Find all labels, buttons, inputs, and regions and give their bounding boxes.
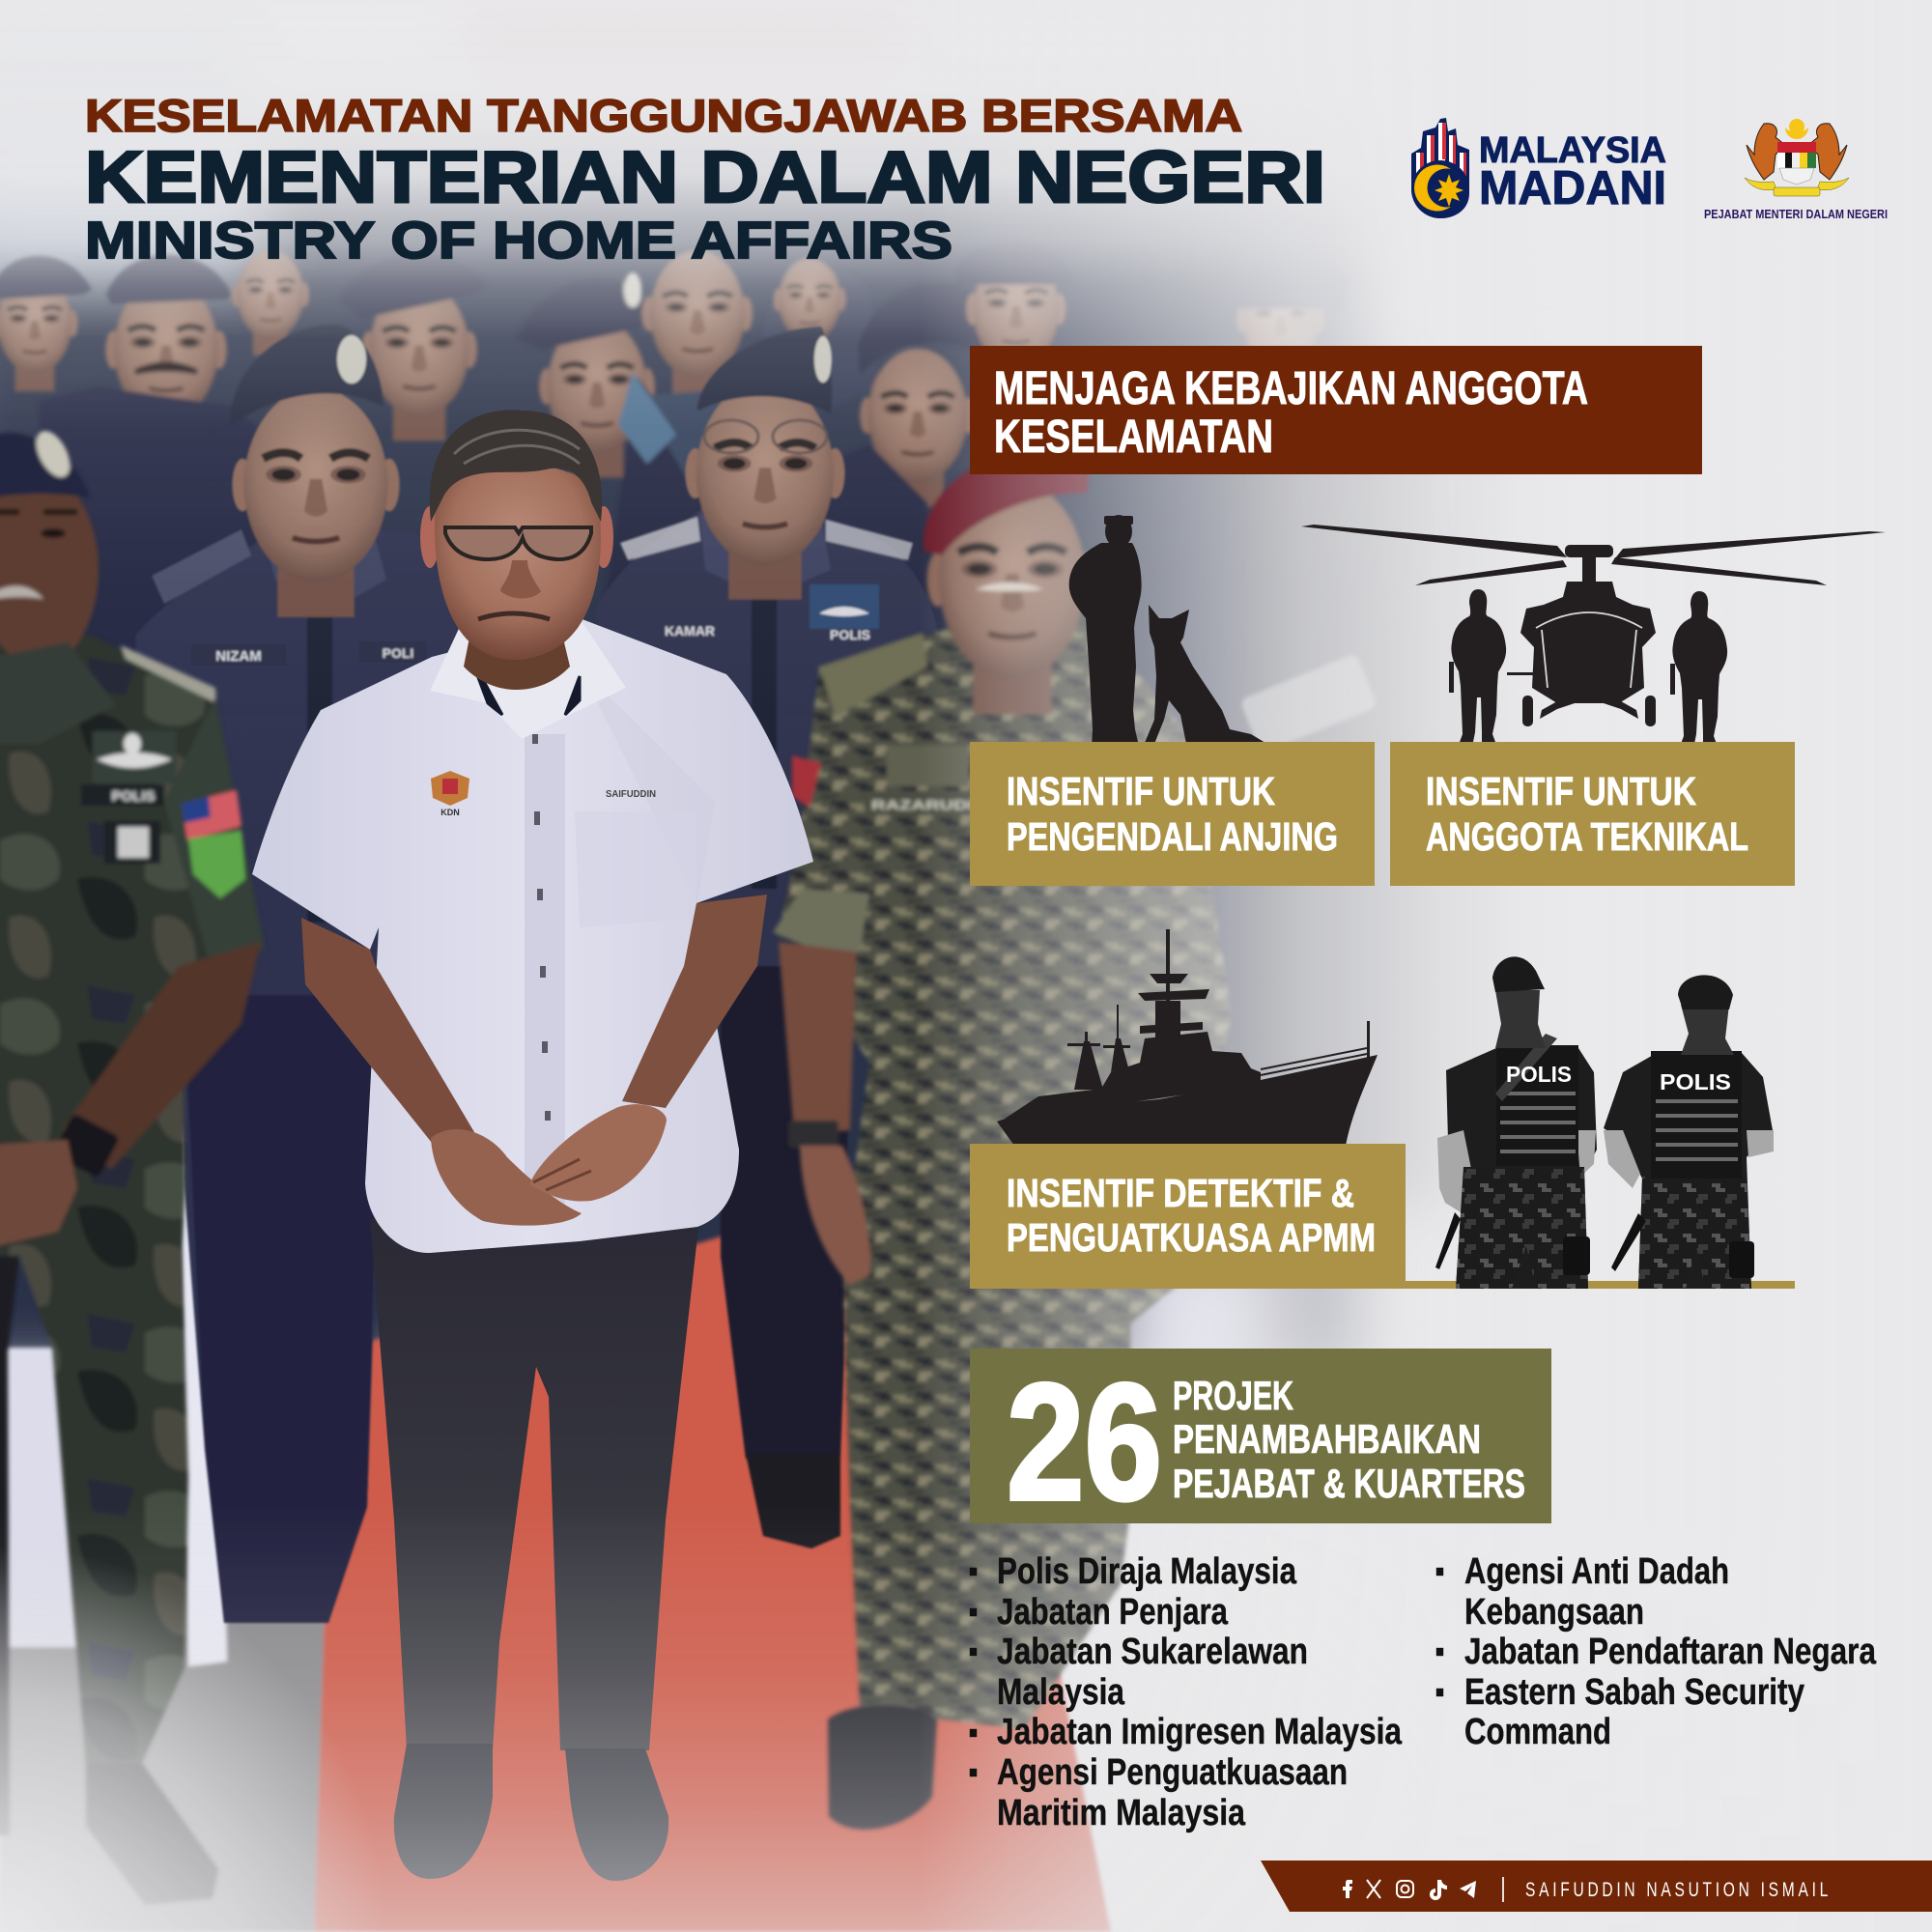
right side fade bbox=[918, 0, 1932, 1932]
list: agencies column one: Agensi Penguatkuasaan bbox=[997, 1752, 1348, 1793]
panel: insentif anggota teknikal: INSENTIF UNTUK bbox=[1426, 769, 1696, 813]
caption: PEJABAT MENTERI DALAM NEGERI bbox=[1704, 207, 1888, 221]
list: agencies column one: Malaysia bbox=[997, 1672, 1125, 1713]
panel: insentif anggota teknikal bbox=[1390, 742, 1795, 886]
name tag: SAIFUDDIN bbox=[606, 789, 656, 800]
panel: insentif anggota teknikal: ANGGOTA TEKNIKAL bbox=[1426, 814, 1748, 859]
officer Kamar: KAMAR bbox=[665, 623, 715, 639]
list: agencies column one: Maritim Malaysia bbox=[997, 1793, 1246, 1833]
officer Kamar bbox=[594, 327, 952, 1548]
list: agencies column two bbox=[1436, 1551, 1877, 1752]
white shirt bbox=[252, 618, 813, 1253]
panel: heading banner bbox=[970, 346, 1702, 474]
head bbox=[420, 410, 613, 690]
trousers bbox=[370, 1219, 699, 1750]
list: agencies column one: Jabatan Sukarelawan bbox=[997, 1632, 1308, 1672]
panel: 26 projek penambahbaikan: PEJABAT & KUARTERS bbox=[1173, 1461, 1525, 1506]
list: agencies column one bbox=[970, 1551, 1403, 1833]
list: agencies column two: Kebangsaan bbox=[1464, 1592, 1644, 1633]
arms bbox=[301, 918, 474, 1157]
icon: tiktok bbox=[1430, 1880, 1447, 1900]
officer left: POLIS bbox=[1506, 1062, 1572, 1087]
panel: 26 projek penambahbaikan bbox=[970, 1349, 1551, 1535]
logo: Malaysia Madani: MALAYSIA bbox=[1479, 130, 1666, 171]
background crowd bbox=[0, 241, 1378, 773]
officer right: POLIS bbox=[1660, 1069, 1731, 1094]
panel: insentif detektif dan penguatkuasa APMM: INSENTIF DETEKTIF & bbox=[1007, 1171, 1354, 1215]
haze over rear rows bbox=[0, 0, 1932, 869]
hands bbox=[431, 1129, 582, 1226]
officer right bbox=[1604, 975, 1774, 1289]
panel: insentif pengendali anjing: PENGENDALI ANJING bbox=[1007, 814, 1338, 859]
panel: 26 projek penambahbaikan: PROJEK bbox=[1173, 1373, 1293, 1418]
title: Kementerian Dalam Negeri: KEMENTERIAN DALAM NEGERI bbox=[85, 136, 1325, 217]
officer Nizam: NIZAM bbox=[215, 648, 262, 665]
list: agencies column two: Eastern Sabah Security bbox=[1464, 1672, 1804, 1713]
icon: soldier and dog silhouette bbox=[1069, 515, 1275, 750]
panel: 26 projek penambahbaikan: PENAMBAHBAIKAN bbox=[1173, 1416, 1481, 1462]
icon: telegram bbox=[1460, 1881, 1476, 1898]
list: agencies column one: Jabatan Penjara bbox=[997, 1592, 1229, 1633]
panel: insentif detektif dan penguatkuasa APMM bbox=[970, 1144, 1795, 1289]
title block bbox=[85, 90, 1325, 270]
panel: heading banner: KESELAMATAN bbox=[994, 412, 1273, 463]
bottom fade bbox=[0, 1497, 1932, 1932]
icon: X bbox=[1367, 1880, 1380, 1898]
icon: two police officers bbox=[1435, 956, 1774, 1289]
soft dark mass of the crowd bbox=[0, 0, 1497, 1468]
officer Kamar: POLIS bbox=[830, 627, 870, 642]
logo: Malaysia Madani: MADANI bbox=[1479, 162, 1666, 214]
emblem: KDN bbox=[431, 771, 469, 817]
title: Keselamatan Tanggungjawab Bersama: KESELAMATAN TANGGUNGJAWAB BERSAMA bbox=[85, 90, 1242, 141]
collar bbox=[430, 618, 626, 739]
panel: insentif pengendali anjing: INSENTIF UNTUK bbox=[1007, 769, 1275, 813]
shoes bbox=[394, 1744, 493, 1879]
soldier on the right: RAZARUDIN bbox=[871, 797, 987, 812]
soldier on the left: POLIS bbox=[111, 788, 156, 805]
logo: Pejabat Menteri Dalam Negeri crest bbox=[1704, 119, 1888, 221]
list: agencies column two: Command bbox=[1464, 1712, 1611, 1752]
footer band bbox=[1261, 1861, 1932, 1912]
icon: instagram bbox=[1397, 1881, 1413, 1897]
list: agencies column one: Polis Diraja Malaysia bbox=[997, 1551, 1297, 1592]
floor, table and carpet bbox=[0, 966, 1111, 1932]
panel: insentif detektif dan penguatkuasa APMM: PENGUATKUASA APMM bbox=[1007, 1215, 1376, 1260]
title: Ministry of Home Affairs: MINISTRY OF HOME AFFAIRS bbox=[85, 212, 952, 270]
soldier on the left bbox=[0, 425, 265, 1905]
panel: heading banner: MENJAGA KEBAJIKAN ANGGOTA bbox=[994, 363, 1588, 414]
icon: facebook bbox=[1343, 1880, 1352, 1898]
emblem: KDN: KDN bbox=[440, 808, 460, 817]
officer Nizam bbox=[135, 325, 464, 1623]
list: agencies column two: Agensi Anti Dadah bbox=[1464, 1551, 1729, 1592]
officer Nizam: POLI bbox=[383, 645, 413, 661]
officer left bbox=[1435, 956, 1597, 1289]
list: agencies column one: Jabatan Imigresen Malaysia bbox=[997, 1712, 1403, 1752]
central figure: Saifuddin bbox=[252, 410, 813, 1881]
icon: warship silhouette bbox=[997, 929, 1378, 1146]
logo: Malaysia Madani bbox=[1411, 118, 1666, 218]
icon: helicopter with two troopers bbox=[1301, 525, 1886, 744]
panel: insentif pengendali anjing bbox=[970, 742, 1375, 886]
soldier on the right bbox=[773, 448, 1232, 1830]
footer name: SAIFUDDIN NASUTION ISMAIL bbox=[1525, 1879, 1832, 1901]
big number 26: 26 bbox=[1007, 1350, 1162, 1535]
bottom-left fade bbox=[0, 1546, 386, 1932]
